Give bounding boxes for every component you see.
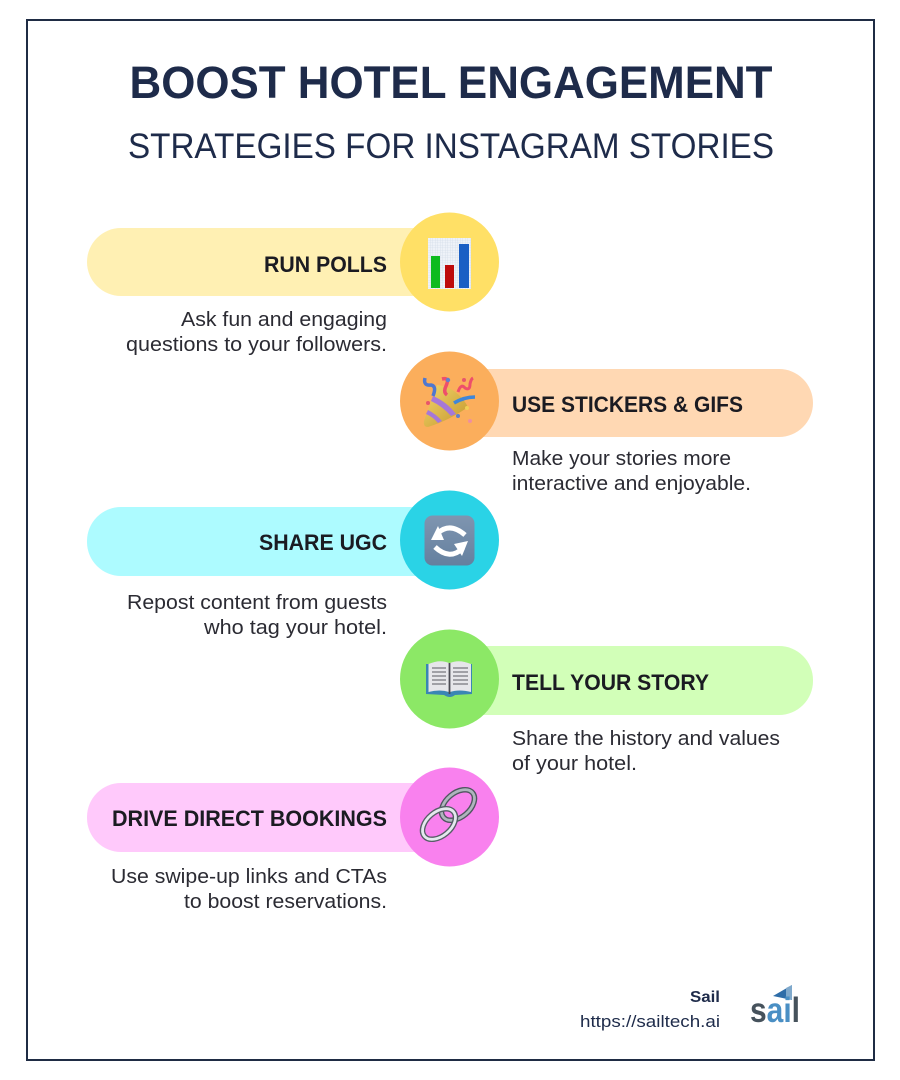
pill: story — [450, 646, 813, 715]
panel: tell your story — [400, 630, 813, 775]
icon: chain links — [417, 784, 480, 845]
description: ugc: Repost content from guests — [127, 592, 387, 614]
description: bookings: Use swipe-up links and CTAs — [111, 866, 387, 888]
description: bookings — [111, 866, 387, 913]
pill: bookings — [87, 783, 450, 852]
description: stickers — [512, 448, 751, 495]
pill: ugc — [87, 507, 450, 576]
description: stickers: Make your stories more — [512, 448, 731, 470]
heading: bookings: DRIVE DIRECT BOOKINGS — [112, 806, 387, 831]
pill: run polls — [87, 228, 450, 296]
description: bookings: to boost reservations. — [184, 891, 387, 913]
description: story — [512, 728, 780, 775]
heading: ugc: SHARE UGC — [259, 530, 387, 555]
icon circle: bookings — [400, 768, 499, 866]
icon: repeat arrows — [424, 516, 474, 566]
title: BOOST HOTEL ENGAGEMENT — [130, 57, 772, 108]
pill: stickers — [450, 369, 813, 437]
heading: story: TELL YOUR STORY — [512, 670, 709, 695]
description: story: of your hotel. — [512, 753, 637, 775]
subtitle: STRATEGIES FOR INSTAGRAM STORIES — [128, 127, 774, 166]
panel: use stickers and gifs — [400, 352, 813, 495]
icon circle: run polls — [400, 212, 499, 312]
description: story: Share the history and values — [512, 728, 780, 750]
description: ugc: who tag your hotel. — [203, 617, 387, 639]
description: run polls — [126, 309, 387, 356]
description: ugc — [127, 592, 387, 639]
description: stickers: interactive and enjoyable. — [512, 473, 751, 495]
icon circle: ugc — [400, 490, 499, 590]
footer brand name: Sail — [690, 989, 720, 1006]
icon: bar chart — [428, 238, 471, 289]
logo: sail: sail — [750, 991, 800, 1030]
heading: stickers: USE STICKERS & GIFS — [512, 392, 743, 417]
description: run polls: questions to your followers. — [126, 334, 387, 356]
icon circle: stickers — [400, 352, 499, 450]
panel: run polls — [87, 212, 499, 356]
heading: run polls: RUN POLLS — [264, 252, 387, 277]
panel: share ugc — [87, 490, 499, 639]
icon: open book — [426, 661, 472, 697]
icon circle: story — [400, 630, 499, 728]
icon: party popper — [424, 378, 475, 427]
description: run polls: Ask fun and engaging — [181, 309, 387, 331]
footer url: https://sailtech.ai — [580, 1012, 720, 1031]
panel: drive direct bookings — [87, 768, 499, 913]
